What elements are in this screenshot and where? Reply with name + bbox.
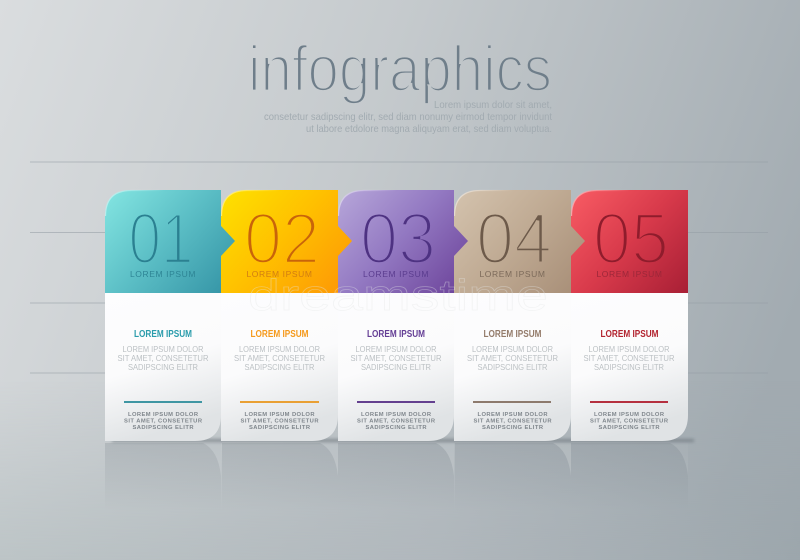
card 02 footnote: LOREM IPSUM DOLOR	[244, 412, 315, 418]
card 01 label: LOREM IPSUM	[130, 269, 196, 279]
card 03 description: SADIPSCING ELITR	[361, 362, 431, 372]
card 01 description: LOREM IPSUM DOLOR	[122, 344, 204, 354]
card 05 label: LOREM IPSUM	[596, 269, 663, 279]
card 04 footnote: SADIPSCING ELITR	[482, 425, 544, 431]
card 05 heading: LOREM IPSUM	[600, 329, 658, 340]
card 01 description: SADIPSCING ELITR	[128, 362, 198, 372]
card 01 footnote: LOREM IPSUM DOLOR	[128, 412, 199, 418]
card 05 description: SADIPSCING ELITR	[594, 362, 664, 372]
intro text block: Lorem ipsum dolor sit amet,	[434, 100, 552, 111]
card 03 rule	[357, 401, 435, 403]
card 04 rule	[473, 401, 551, 403]
card 01 rule	[124, 401, 202, 403]
card 04 footnote: SIT AMET, CONSETETUR	[474, 418, 552, 424]
card 01 footnote	[124, 412, 203, 431]
card 02 label: LOREM IPSUM	[246, 269, 313, 279]
card 04 footnote: LOREM IPSUM DOLOR	[478, 412, 548, 418]
card 03	[338, 190, 468, 441]
card 01 heading: LOREM IPSUM	[134, 329, 192, 340]
card 05	[571, 190, 688, 441]
card shadows	[112, 439, 694, 442]
card 04 label: LOREM IPSUM	[479, 269, 546, 279]
card 03 footnote: LOREM IPSUM DOLOR	[361, 412, 432, 418]
card 05 footnote	[590, 412, 669, 431]
card 04 heading: LOREM IPSUM	[484, 329, 542, 340]
card 01 footnote: SADIPSCING ELITR	[132, 425, 194, 431]
card 04 footnote	[474, 412, 552, 431]
intro text block	[264, 100, 552, 135]
card 05 footnote: SADIPSCING ELITR	[598, 425, 660, 431]
card 03 heading: LOREM IPSUM	[367, 329, 425, 340]
card 05 description: LOREM IPSUM DOLOR	[588, 344, 670, 354]
card 02 rule	[240, 401, 319, 403]
card 04 white body	[454, 293, 571, 441]
card 04 description: SIT AMET, CONSETETUR	[467, 353, 558, 363]
card 02 coloured tab with arrow	[221, 190, 352, 293]
card 05 description: SIT AMET, CONSETETUR	[584, 353, 674, 363]
card 05 rule	[590, 401, 668, 403]
card 02 description: LOREM IPSUM DOLOR	[239, 344, 320, 354]
card 04	[454, 190, 585, 441]
card 01	[105, 190, 235, 441]
card 02 number: 02	[244, 200, 320, 280]
card 03 description: SIT AMET, CONSETETUR	[350, 353, 442, 363]
card 04 coloured tab with arrow	[454, 190, 585, 293]
card 03 coloured tab with arrow	[338, 190, 468, 293]
card 03 white body	[338, 293, 454, 441]
card 03 label: LOREM IPSUM	[363, 269, 429, 279]
card 03 description	[350, 344, 442, 372]
card 04 description	[467, 344, 558, 372]
card 01 number: 01	[128, 200, 194, 280]
card 05 footnote: SIT AMET, CONSETETUR	[590, 418, 669, 424]
card 02 footnote	[240, 412, 319, 431]
card 05 white body	[571, 293, 688, 441]
card 02 description: SIT AMET, CONSETETUR	[234, 353, 325, 363]
card 02 description: SADIPSCING ELITR	[244, 362, 315, 372]
card 03 footnote: SADIPSCING ELITR	[366, 425, 427, 431]
card 02 footnote: SADIPSCING ELITR	[249, 425, 311, 431]
card 03 description: LOREM IPSUM DOLOR	[356, 344, 436, 354]
floor reflections	[105, 443, 688, 510]
card 02 description	[234, 344, 325, 372]
card 01 coloured tab with arrow	[105, 190, 235, 293]
card 05 footnote: LOREM IPSUM DOLOR	[594, 412, 665, 418]
intro text block: ut labore etdolore magna aliquyam erat, sed diam voluptua.	[306, 124, 552, 135]
card 05 number: 05	[593, 200, 669, 280]
card 02 white body	[221, 293, 338, 441]
card 05 description	[584, 344, 674, 372]
card 03 footnote: SIT AMET, CONSETETUR	[357, 418, 436, 424]
card 03 number: 03	[360, 200, 436, 280]
card 03 footnote	[357, 412, 436, 431]
title: infographics	[248, 32, 552, 105]
card 02	[221, 190, 352, 441]
card 04 description: LOREM IPSUM DOLOR	[472, 344, 553, 354]
card 02 footnote: SIT AMET, CONSETETUR	[240, 418, 319, 424]
card 01 description: SIT AMET, CONSETETUR	[118, 353, 208, 363]
watermark: dreamstime	[248, 271, 548, 320]
card 01 description	[118, 344, 208, 372]
card 04 number: 04	[476, 200, 552, 280]
card 05 coloured tab	[571, 190, 688, 293]
card 04 description: SADIPSCING ELITR	[478, 362, 548, 372]
intro text block: consetetur sadipscing elitr, sed diam nonumy eirmod tempor invidunt	[264, 112, 552, 123]
card 02 heading: LOREM IPSUM	[250, 329, 308, 340]
card 01 footnote: SIT AMET, CONSETETUR	[124, 418, 203, 424]
card 01 white body	[105, 293, 221, 441]
